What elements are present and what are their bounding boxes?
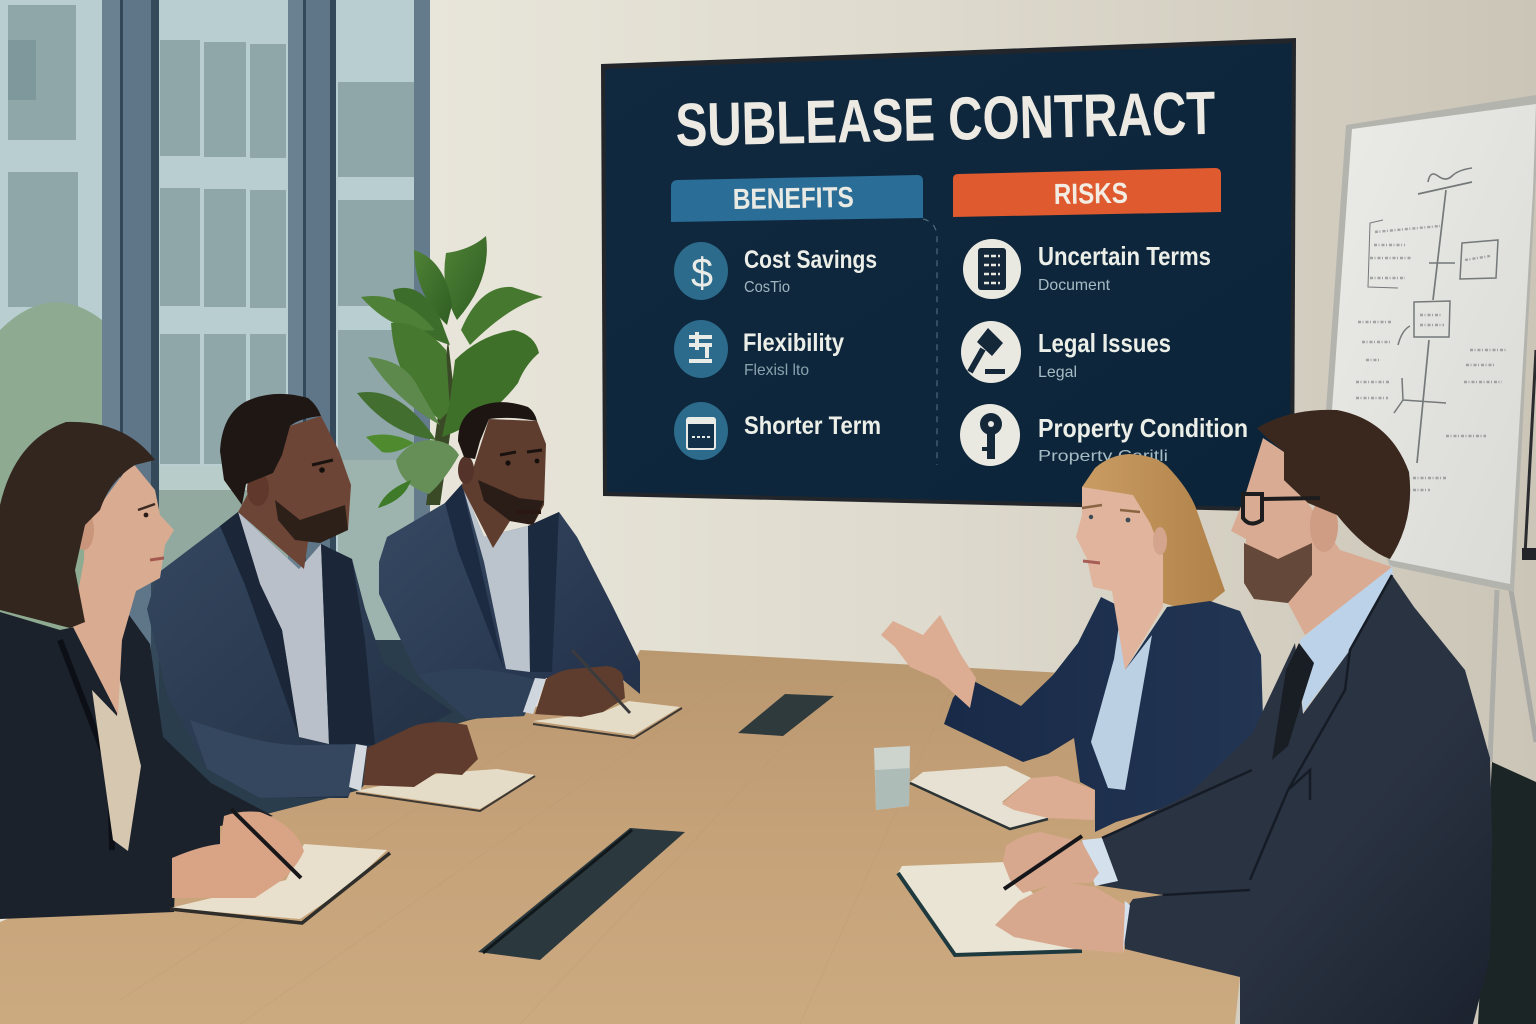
meeting table (0, 650, 1240, 1024)
open notebook (898, 862, 1082, 955)
water glass (874, 746, 910, 810)
benefit: shorter term: Shorter Term (744, 412, 881, 440)
blouse (92, 676, 141, 851)
notebook (356, 769, 535, 811)
hair (0, 422, 155, 628)
risk: uncertain terms (963, 239, 1211, 299)
person: man centre-right of left group (379, 402, 682, 738)
whiteboard sketch (1356, 168, 1506, 490)
risks header (953, 168, 1221, 217)
lapel shadow (60, 640, 112, 850)
lapels (220, 512, 375, 745)
face and chest (72, 462, 174, 715)
screen bezel (601, 38, 1296, 512)
face and neck (1076, 487, 1163, 670)
person: man right (898, 410, 1492, 1024)
chair behind man right (1478, 762, 1536, 1024)
face and neck (1231, 438, 1392, 635)
face and neck (462, 419, 546, 548)
shirt collar (1300, 565, 1394, 712)
hair (458, 402, 537, 459)
benefit: flexibility: Flexisl lto (744, 362, 809, 379)
notebook (910, 766, 1048, 829)
raised hand (881, 615, 976, 708)
beard (1244, 543, 1312, 603)
presentation screen (601, 38, 1296, 512)
notebook (533, 701, 682, 738)
hair (220, 394, 321, 505)
hands (363, 722, 478, 787)
benefit: cost savings: $ (691, 249, 713, 296)
jacket (147, 512, 453, 798)
benefit: cost savings: Cost Savings (744, 246, 877, 274)
glasses (1243, 494, 1320, 524)
window frame mullions (102, 0, 430, 760)
cuffs (1082, 838, 1130, 953)
shirt (238, 512, 329, 744)
person: woman left (0, 422, 390, 923)
title: SUBLEASE CONTRACT (675, 79, 1216, 159)
hair (1257, 410, 1410, 559)
risk: legal issues (961, 321, 1171, 383)
pen (231, 809, 301, 878)
table inlay: small (738, 694, 834, 736)
risk: property condition (960, 404, 1248, 466)
risk: property condition: Property Condition (1038, 413, 1248, 443)
person: woman right (881, 454, 1263, 832)
risk: property condition: Property Caritli (1038, 448, 1168, 465)
hand and pen (535, 650, 630, 717)
jacket (379, 484, 640, 719)
benefit: cost savings (674, 242, 877, 300)
risk: uncertain terms: Uncertain Terms (1038, 241, 1211, 271)
potted plant (357, 236, 543, 508)
risk: legal issues: Legal Issues (1038, 328, 1171, 358)
benefits header (671, 175, 923, 222)
wall wedge under arm (552, 640, 574, 678)
benefit: shorter term (674, 402, 881, 460)
whiteboard on stand (1326, 95, 1536, 762)
jacket (1095, 575, 1492, 1024)
blouse (1091, 611, 1152, 790)
risk: legal issues: Legal (1038, 364, 1077, 381)
risks header: RISKS (1054, 178, 1128, 211)
lapels and shirt (462, 484, 530, 672)
hands (995, 832, 1125, 953)
jacket details (1102, 575, 1392, 895)
risk: uncertain terms: Document (1038, 277, 1111, 294)
face and neck (238, 416, 351, 569)
benefit: flexibility: Flexibility (743, 329, 844, 357)
resting hand (1002, 776, 1095, 820)
screen display (605, 43, 1292, 508)
column divider (923, 219, 937, 465)
window with city building (0, 0, 430, 760)
benefits header: BENEFITS (733, 182, 854, 216)
jacket (944, 597, 1263, 832)
dark seating area behind the table (0, 630, 480, 870)
sleeve (418, 669, 535, 719)
benefit: flexibility (674, 320, 844, 379)
jacket (0, 598, 273, 919)
notebook (170, 844, 390, 923)
pen (1004, 836, 1082, 889)
table inlay: large (478, 828, 685, 960)
sleeve (190, 720, 356, 798)
hair (1082, 454, 1225, 609)
tie (1272, 643, 1314, 760)
benefit: cost savings: CosTio (744, 279, 790, 296)
hand (172, 812, 304, 898)
person: man centre-left (147, 394, 535, 811)
